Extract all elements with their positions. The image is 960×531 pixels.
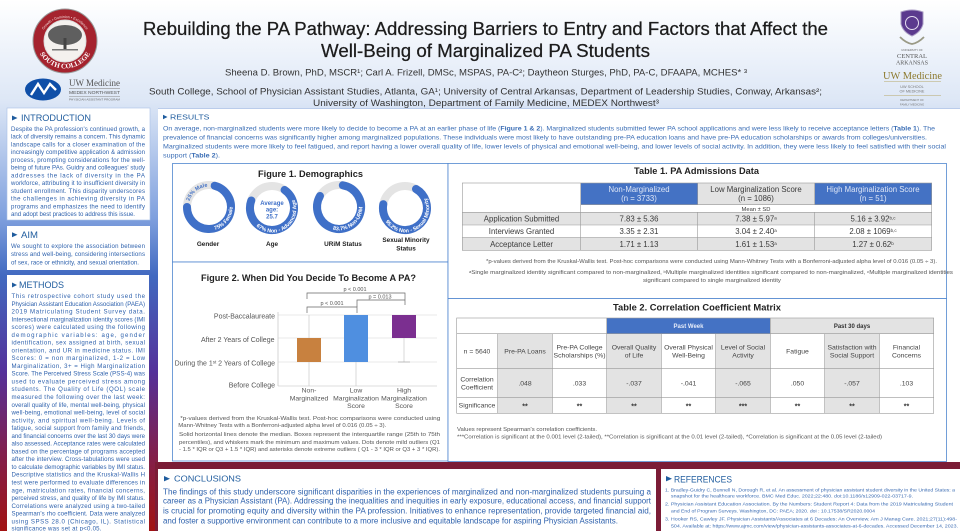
table: correlation coefficients: .033 — [573, 380, 586, 387]
logo: South College seal: Growth • Dominion • Excellence — [42, 15, 88, 30]
donut chart: age: Age — [266, 241, 278, 248]
table: correlation coefficients: Past 30 days — [834, 324, 871, 330]
table: correlation coefficients: Level of Social — [721, 344, 766, 352]
panel: methods — [7, 275, 149, 531]
note: figure 2 footnotes: percentiles), and whiskers mark the minimum and maximum values. Dots denote mild outliers (Q1 — [179, 440, 440, 446]
text: conclusions body — [163, 487, 652, 525]
logo: University of Central Arkansas and UW School of Medicine: UW SCHOOL — [900, 85, 924, 89]
table: admissions data: Low Marginalization Score — [710, 185, 802, 194]
table: correlation coefficients: .103 — [900, 380, 913, 387]
table: admissions data: (n = 51) — [859, 194, 887, 203]
note: figure 2 footnotes: Mann-Whitney Tests with a Bonferroni-adjusted alpha level of 0.016 (0.05 ÷ 3). — [178, 423, 386, 429]
table: admissions data: Mean ± SD — [742, 207, 770, 213]
table: correlation coefficients: Pre-PA College — [557, 344, 603, 352]
table: admissions data: Non-Marginalized — [608, 185, 670, 194]
table: correlation coefficients: ** — [904, 404, 909, 410]
table: correlation coefficients: ** — [631, 404, 637, 410]
table: correlation coefficients: Correlation — [460, 376, 494, 383]
note: figure 2 footnotes — [178, 416, 441, 453]
table: correlation coefficients: ** — [522, 404, 528, 410]
text: methods body: used to evaluate perceived stress among — [12, 378, 145, 386]
table: correlation coefficients: Financial — [893, 344, 921, 352]
text: results summary: prevalence of financial concerns was significantly higher among marginalized populations. These individuals were most likely to have outstanding pre-PA education loans and have pre-PA education scholarships or awards from colleges/universities. — [163, 134, 927, 141]
table: correlation coefficients: Past Week — [674, 324, 704, 330]
table: admissions data: 3.04 ± 2.40 — [735, 227, 774, 236]
text: methods body: well-being, emotional well-being, level of social — [10, 410, 145, 417]
donut chart: gender: Gender — [197, 241, 220, 248]
text: reference list: 504. Available at: https://www.ajmc.com/view/physician-assistants-associates-at-6-decades. Accessed December 14, 2023. — [671, 524, 958, 530]
box plot chart: Marginalization — [381, 396, 427, 402]
box plot chart: 2 Years of College — [216, 360, 275, 368]
table: correlation coefficients: Activity — [732, 352, 754, 360]
table: admissions data — [462, 183, 932, 250]
panel: aim — [7, 226, 150, 270]
table: correlation coefficients: ** — [795, 404, 800, 410]
table: correlation coefficients: .048 — [518, 380, 532, 387]
panel: results — [158, 108, 960, 462]
note: figure 2 footnotes: *p-values derived from the Kruskal-Wallis test. Post-hoc comparisons were conducted using — [180, 416, 441, 422]
text: methods body: Descriptive statistics and the Kruskal-Wallis H — [12, 472, 145, 479]
table: correlation coefficients: Concerns — [892, 352, 922, 360]
table: admissions data: Application Submitted — [484, 214, 559, 224]
text: introduction body: increasingly competitive application & admission — [11, 149, 145, 156]
donut chart: URiM status — [312, 181, 366, 248]
panel: conclusions — [158, 469, 656, 531]
text: introduction body: workforce, attributing it to insufficient diversity in — [10, 180, 145, 187]
note: table 2 footnotes — [457, 427, 882, 440]
text: methods body: demographic variables: age, gender — [12, 332, 145, 339]
box: high marginalization — [392, 315, 416, 338]
heading: references: REFERENCES — [674, 474, 732, 486]
table: admissions data: 1.27 ± 0.62 — [852, 240, 891, 249]
table: admissions data: High Marginalization Score — [826, 185, 920, 194]
logo: UW Medicine MEDEX Northwest: MEDEX NORTHWEST — [69, 90, 121, 95]
table: correlation coefficients: Scholarships (%) — [554, 352, 606, 360]
box plot chart: st — [213, 360, 217, 364]
box: low marginalization — [344, 315, 368, 362]
logo: University of Central Arkansas and UW School of Medicine — [883, 10, 942, 106]
logo: University of Central Arkansas and UW School of Medicine: UW Medicine — [883, 71, 942, 82]
table: correlation coefficients — [457, 318, 934, 413]
heading: results: RESULTS — [170, 113, 210, 122]
table: correlation coefficients: -.041 — [681, 380, 696, 387]
table: admissions data: (n = 3733) — [621, 194, 657, 203]
panel: table 2 correlation matrix — [448, 298, 946, 462]
note: table 2 footnotes: ***Correlation is significant at the 0.001 level (2-tailed), **Correlation is significant at the 0.01 level (2-tailed), *Correlation is significant at the 0.05 level (2-tailed) — [457, 434, 882, 440]
heading: conclusions: CONCLUSIONS — [174, 474, 242, 484]
box: non-marginalized — [297, 338, 321, 362]
text: reference list: snapshot for the healthcare workforce. BMC Med Educ. 2022;22:480. doi:10.1186/s12909-022-03717-9. — [671, 494, 913, 500]
table: admissions data: b,c — [889, 216, 896, 220]
text: methods body: Score. The Perceived Stress Scale (PSS-4) was — [12, 371, 145, 378]
table: correlation coefficients: -.057 — [844, 380, 860, 387]
table: admissions data: a — [774, 216, 777, 220]
text: introduction body: being of future PAs. Guidry and colleagues' study — [11, 165, 146, 172]
text: methods body: orientation, and UR in medicine status. IMI — [12, 347, 145, 354]
text: reference list: and End of Program Surveys. Washington, DC: PAEA; 2020. doi : 10.17538/SR2020.0004 — [671, 509, 875, 515]
box plot chart: High — [397, 388, 411, 394]
text: aim body: stress and well-being, considering intersections — [11, 251, 145, 258]
table: correlation coefficients: of Life — [625, 352, 643, 360]
heading: table 2: Table 2. Correlation Coefficient Matrix — [613, 302, 781, 312]
text: results summary: Marginalized students were more likely to feel fatigued, and report having a lower overall quality of life, lower levels of physical and emotional well-being, and lower levels of social activity. In addition, they were less likely to feel satisfied with their social — [163, 143, 946, 150]
text: methods body: using SPSS 28.0 (Chicago, IL). Statistical — [12, 518, 145, 525]
note: table 1 footnotes: *p-values derived from the Kruskal-Wallis test. Post-hoc comparisons were conducted using Mann-Whitney Tests with a Bonferroni-adjusted alpha level of 0.016 (0.05 ÷ 3). — [486, 259, 937, 265]
text: conclusions body: and foster a supportive environment can contribute to a more inclusive and equitable landscape for aspiring Physician Assistants. — [163, 516, 618, 525]
table: correlation coefficients: Overall Quality — [612, 344, 657, 352]
text: introduction body: student enrollment. This disparity underscores — [11, 188, 145, 195]
panel: introduction — [7, 108, 150, 220]
table: admissions data: 7.83 ± 5.36 — [620, 214, 658, 224]
text: methods body: Correlations were analyzed using a two-tailed — [12, 503, 145, 510]
text: aim body — [11, 243, 145, 266]
text: reference list: 3. Hooker RS, Cawley JF. Physician Assistants/Associates at 6 Decades: An Overview. Am J Manag Care. 2021;27(11):498- — [665, 517, 957, 523]
text: methods body: and financial concerns over the last 30 days were — [12, 433, 146, 440]
donut chart: age — [246, 182, 298, 248]
donut chart: age: 25.7 — [266, 214, 278, 220]
text: introduction body: lack of diversity remains a concern. This dynamic — [11, 134, 145, 141]
logo: University of Central Arkansas and UW School of Medicine: FAMILY MEDICINE — [900, 102, 924, 106]
logo: University of Central Arkansas and UW School of Medicine: DEPARTMENT OF — [900, 98, 924, 102]
text: methods body: 2019 Matriculating Student Survey data. — [12, 308, 145, 316]
text: reference list — [665, 488, 958, 530]
text: methods body: measured the following over the last week: — [12, 394, 145, 401]
donut chart: age: 67% Non - Advanced Age — [256, 200, 297, 233]
logo: University of Central Arkansas and UW School of Medicine: OF MEDICINE — [900, 90, 925, 94]
table: admissions data: 5.16 ± 3.92 — [851, 214, 889, 224]
donut chart: gender — [183, 181, 235, 248]
text: methods body: Spearman's rho coefficient. Data were analyzed — [12, 511, 145, 518]
table: correlation coefficients: Satisfaction with — [827, 344, 877, 352]
note: table 2 footnotes: Values represent Spearman's correlation coefficients. — [457, 427, 597, 433]
panel: figure 1 demographics — [172, 163, 448, 262]
text: methods body: Scores: 0 = non marginalized, 1-2 = Low — [12, 355, 146, 362]
table: admissions data: 1.71 ± 1.13 — [620, 240, 658, 249]
text: methods body: age, matriculation rates, financial concerns, — [12, 487, 145, 494]
logo: UW Medicine MEDEX Northwest: UW Medicine — [69, 79, 120, 89]
text: reference list: 2. Physician Assistant Education Association. By the Numbers: Student Report 4: Data from the 2019 Matriculating Student — [665, 502, 954, 508]
logo: UW Medicine MEDEX Northwest: PHYSICIAN ASSISTANT PROGRAM — [69, 98, 121, 102]
table: admissions data: 1.61 ± 1.53 — [735, 240, 774, 249]
note: table 1 footnotes: significant compared to single marginalized identity — [643, 278, 782, 284]
donut chart: gender: 25% Male — [186, 183, 208, 201]
table: correlation coefficients: n = 5640 — [464, 348, 491, 355]
heading: figure 2: Figure 2. When Did You Decide To Become A PA? — [201, 273, 416, 283]
text: introduction body: and adopt best practices to address this issue. — [11, 211, 135, 218]
table: admissions data: a — [774, 228, 777, 233]
text: conclusions body: The findings of this study underscore significant disparities in the experiences of marginalized and non-marginalized students pursuing a — [163, 487, 652, 496]
table: correlation coefficients: -.065 — [735, 380, 751, 387]
box plot chart — [175, 287, 437, 410]
heading: aim: AIM — [21, 230, 38, 240]
text: introduction body: process, prompting considerations for the well- — [11, 157, 145, 164]
donut chart: URiM status: URiM Status — [324, 241, 362, 248]
text: methods body: also assessed. Acceptance rates were calculated — [12, 441, 145, 448]
significance brackets — [307, 293, 405, 313]
box plot chart: Score — [347, 403, 365, 410]
logo: University of Central Arkansas and UW School of Medicine: CENTRAL — [897, 54, 927, 60]
box plot chart: p = 0.013 — [368, 295, 392, 301]
title: Well-Being of Marginalized PA Students — [321, 41, 650, 61]
table: correlation coefficients: ** — [686, 404, 691, 410]
table: correlation coefficients: Social Support — [830, 352, 874, 360]
text: methods body — [10, 293, 146, 531]
text: introduction body: programs and emphasizes the need to identify — [11, 203, 146, 210]
text: methods body: test were performed to evaluate differences in — [12, 480, 145, 486]
affiliations: South College, School of Physician Assistant Studies, Atlanta, GA¹; University of Central Arkansas, Department of Leadership Studies, Conway, Arkansas²; — [149, 86, 822, 96]
text: reference list: 1. Bradley-Guidry C, Bunnell N, Dorough R, et al. An assessment of physician assistant student diversity in the United States: a — [665, 488, 955, 494]
heading: table 1: Table 1. PA Admissions Data — [634, 166, 759, 176]
text: methods body: This retrospective cohort study used the — [12, 293, 146, 300]
text: methods body: Marginalization, 3+ = High Marginalization — [12, 363, 145, 370]
logo: South College seal — [32, 8, 98, 74]
box plot chart: p < 0.001 — [320, 301, 344, 307]
panel: figure 2 box plot — [172, 262, 448, 461]
text: methods body: overall quality of life, mental well-being, physical — [12, 402, 145, 409]
donut chart: URiM status: 83.7% Non-URiM — [333, 206, 363, 230]
text: introduction body: the challenges in achieving diversity in PA — [11, 196, 146, 203]
table: admissions data: 7.38 ± 5.97 — [735, 214, 774, 224]
text: methods body: scores) were calculated using the following — [12, 324, 145, 331]
text: conclusions body: is crucial for promoting equity and diversity within the PA profession. Initiatives to enhance representation, provide targeted financial aid, — [163, 506, 651, 515]
affiliations — [149, 86, 822, 108]
donut chart: sexual minority status: Sexual Minority — [382, 237, 430, 244]
table: correlation coefficients: ** — [849, 404, 855, 410]
table: correlation coefficients: Overall Physical — [664, 344, 713, 352]
text: introduction body: Despite the PA profession's continued growth, a — [11, 126, 146, 133]
box plot chart: Before College — [229, 382, 275, 390]
heading: introduction: INTRODUCTION — [21, 113, 91, 123]
panel: conclusions and references band — [155, 462, 960, 531]
heading: methods: METHODS — [19, 280, 64, 290]
text: methods body: perceived stress, and quality of life by IMI status. — [12, 495, 145, 502]
text: aim body: of sex, race or ethnicity, and sexual orientation. — [11, 259, 139, 266]
donut chart: sexual minority status: 95.2% Non - Sexual Minority — [386, 198, 430, 232]
table: admissions data: Interviews Granted — [489, 227, 554, 236]
table: correlation coefficients: Pre-PA Loans — [504, 348, 546, 355]
donut chart: age: age: — [266, 208, 278, 214]
panel: references — [661, 469, 960, 531]
logo: UW Medicine MEDEX Northwest — [25, 78, 121, 102]
table: admissions data: 2.08 ± 1069 — [849, 227, 891, 236]
note: figure 2 footnotes: Solid horizontal lines denote the median. Boxes represent the interquartile range (25th to 75th — [179, 432, 440, 438]
box plot chart: Low — [350, 388, 362, 394]
table: correlation coefficients: Fatigue — [786, 348, 809, 355]
logo: University of Central Arkansas and UW School of Medicine: UNIVERSITY OF — [901, 48, 923, 52]
text: methods body: identification, sex assigned at birth, sexual — [12, 340, 145, 347]
donut chart: gender: 75% Female — [214, 206, 233, 230]
donut chart: sexual minority status: Status — [396, 246, 416, 252]
note: figure 2 footnotes: - 1.5 * IQR or Q3 + 1.5 * IQR) and asterisks denote extreme outliers ( Q1 - 3 * IQR or Q3 + 3 * IQR). — [179, 447, 440, 453]
box plot chart: After 2 Years of College — [201, 337, 275, 344]
panel: table 1 admissions data — [448, 164, 954, 298]
text: methods body: after the interview. Cross-tabulations were used — [12, 456, 145, 463]
heading: figure 1: Figure 1. Demographics — [258, 169, 363, 179]
table: correlation coefficients: ** — [577, 404, 582, 410]
affiliations: University of Washington, Department of Family Medicine, MEDEX Northwest³ — [313, 98, 659, 108]
note: table 1 footnotes: ᵃSingle marginalized identity significant compared to non-marginalized, ᵇMultiple marginalized identities significant compared to non-marginalized, ᶜMultiple marginalized identities — [469, 270, 954, 276]
heading: aim — [12, 230, 38, 240]
box plot chart: p < 0.001 — [343, 287, 367, 293]
text: results summary — [163, 125, 946, 159]
table: correlation coefficients: Well-Being — [672, 352, 705, 360]
donut chart: sexual minority status — [378, 182, 431, 252]
text: aim body: We sought to explore the association between — [11, 243, 145, 250]
text: methods body: Physician Assistant Education Association (PAEA) — [12, 301, 145, 308]
table: correlation coefficients: .050 — [791, 380, 804, 387]
title — [143, 19, 828, 61]
box plot chart: Post-Baccalaureate — [214, 314, 275, 320]
table: admissions data: Acceptance Letter — [490, 240, 553, 249]
box plot chart: Marginalization — [333, 396, 379, 402]
authors: Sheena D. Brown, PhD, MSCR¹; Carl A. Frizell, DMSc, MSPAS, PA-C²; Daytheon Sturges, PhD, PA-C, DFAAPA, MCHES* ³ — [225, 68, 747, 78]
table: admissions data: (n = 1086) — [738, 194, 774, 203]
table: admissions data: a — [774, 241, 777, 246]
table: correlation coefficients: Significance — [459, 402, 496, 410]
table: admissions data: b — [891, 241, 894, 246]
text: introduction body — [10, 126, 146, 218]
note: table 1 footnotes — [469, 259, 954, 284]
text: methods body: based on the percentage of programs accepted — [12, 448, 145, 455]
logo: University of Central Arkansas and UW School of Medicine: ARKANSAS — [896, 60, 928, 66]
text: conclusions body: career as a Physician Assistant (PA). Addressing the inequalities and inequities in early exposure, educational access, and financial support — [163, 497, 652, 506]
box plot chart: Score — [395, 403, 413, 410]
table: admissions data: 3.35 ± 2.31 — [620, 227, 658, 236]
text: methods body: to calculate demographic variables by IMI status. — [12, 464, 145, 471]
text: results summary: support ( Table 2 ). — [163, 152, 220, 159]
table: correlation coefficients: -.037 — [626, 380, 642, 387]
box plot chart: During the 1 — [175, 360, 213, 368]
text: methods body: fatigue, social support from family and friends, — [12, 425, 145, 432]
table: admissions data: b,c — [891, 228, 897, 233]
box plot chart: Non- — [302, 388, 316, 394]
donut chart: age: Average — [260, 201, 284, 207]
logo: South College seal: SOUTH COLLEGE — [40, 52, 90, 68]
box plot chart: Marginalized — [290, 396, 328, 402]
table: correlation coefficients: *** — [739, 404, 747, 410]
text: methods body: students. The Quality of Life (QOL) scale — [12, 386, 146, 393]
table: correlation coefficients: Coefficient — [461, 384, 493, 391]
text: results summary: On average, non-marginalized students were more likely to decide to become a PA at an earlier phase of life ( Figure 1 & 2 ). Marginalized students submitted fewer PA school applications and were less likely to receive acceptance letters ( Table 1 ). The — [163, 125, 936, 132]
text: introduction body: addresses the lack of diversity in the PA — [11, 172, 146, 179]
text: methods body: activity, and spiritual well-being. Levels of — [12, 417, 145, 424]
text: methods body: Intersectional marginalization identity scores (IMI — [12, 316, 145, 323]
title: Rebuilding the PA Pathway: Addressing Barriers to Entry and Factors that Affect the — [143, 19, 828, 39]
text: introduction body: landscape calls for a closer examination of the — [11, 142, 146, 148]
